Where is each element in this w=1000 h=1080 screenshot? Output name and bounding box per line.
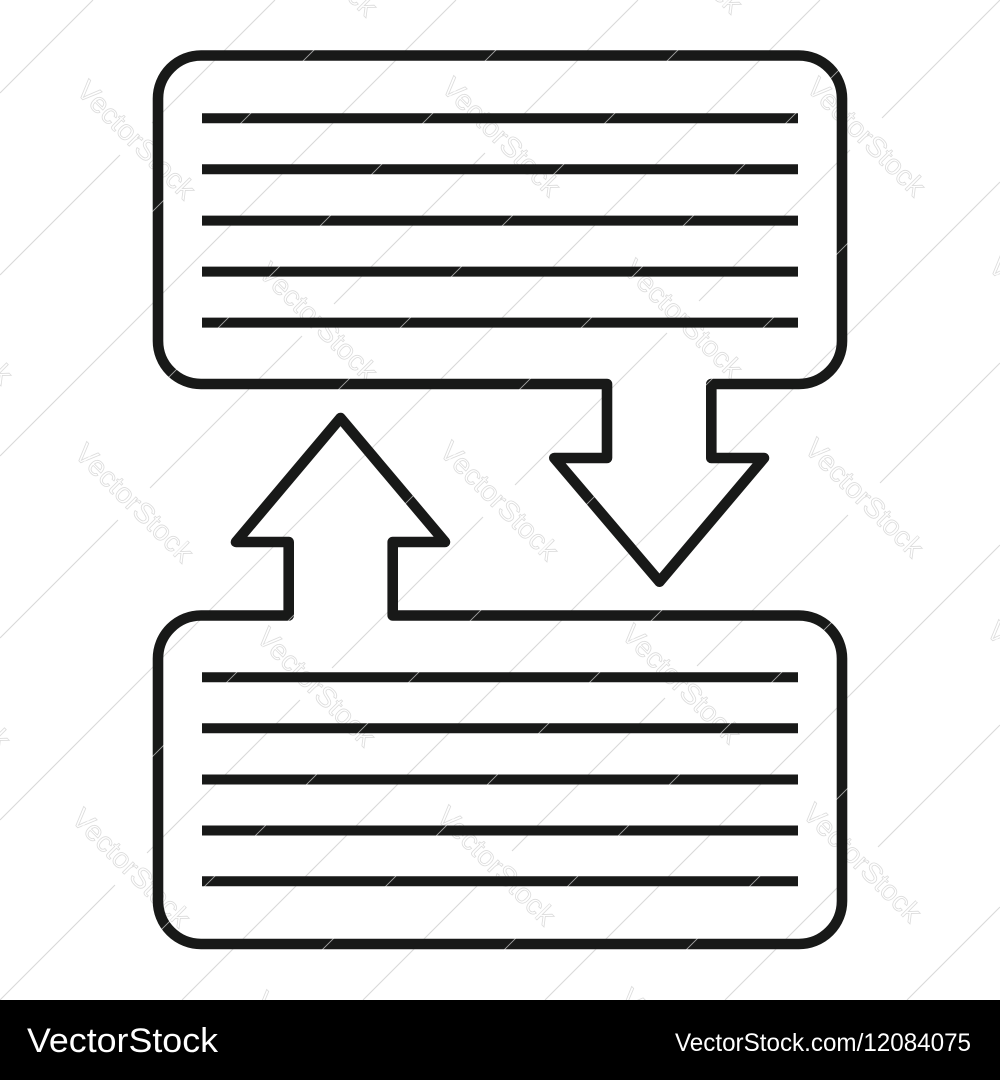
watermark text: VectorStock (434, 435, 565, 567)
watermark text: VectorStock (251, 621, 382, 753)
brand name: VectorStock (27, 1022, 219, 1060)
watermark text: VectorStock (431, 800, 562, 932)
bottom box outline with up arrow (158, 418, 842, 944)
panel: top text box with down arrow (158, 56, 842, 582)
watermark text: VectorStock (71, 74, 202, 206)
watermark text: VectorStock (616, 618, 747, 750)
text lines: top box (202, 118, 798, 323)
watermark text: VectorStock (797, 797, 928, 929)
watermark text: VectorStock (618, 253, 749, 385)
text lines: bottom box (202, 677, 798, 881)
watermark text: VectorStock (253, 256, 384, 388)
watermark text: VectorStock (66, 802, 197, 934)
watermark text: VectorStock (799, 432, 930, 564)
panel: bottom text box with up arrow (158, 418, 842, 944)
watermark text: VectorStock (69, 437, 200, 569)
watermark text: VectorStock (436, 71, 567, 203)
watermark text: VectorStock (801, 71, 932, 203)
image reference: VectorStock.com/12084075 (675, 1029, 971, 1057)
footer bar (0, 1000, 1000, 1080)
top box outline with down arrow (158, 56, 842, 582)
